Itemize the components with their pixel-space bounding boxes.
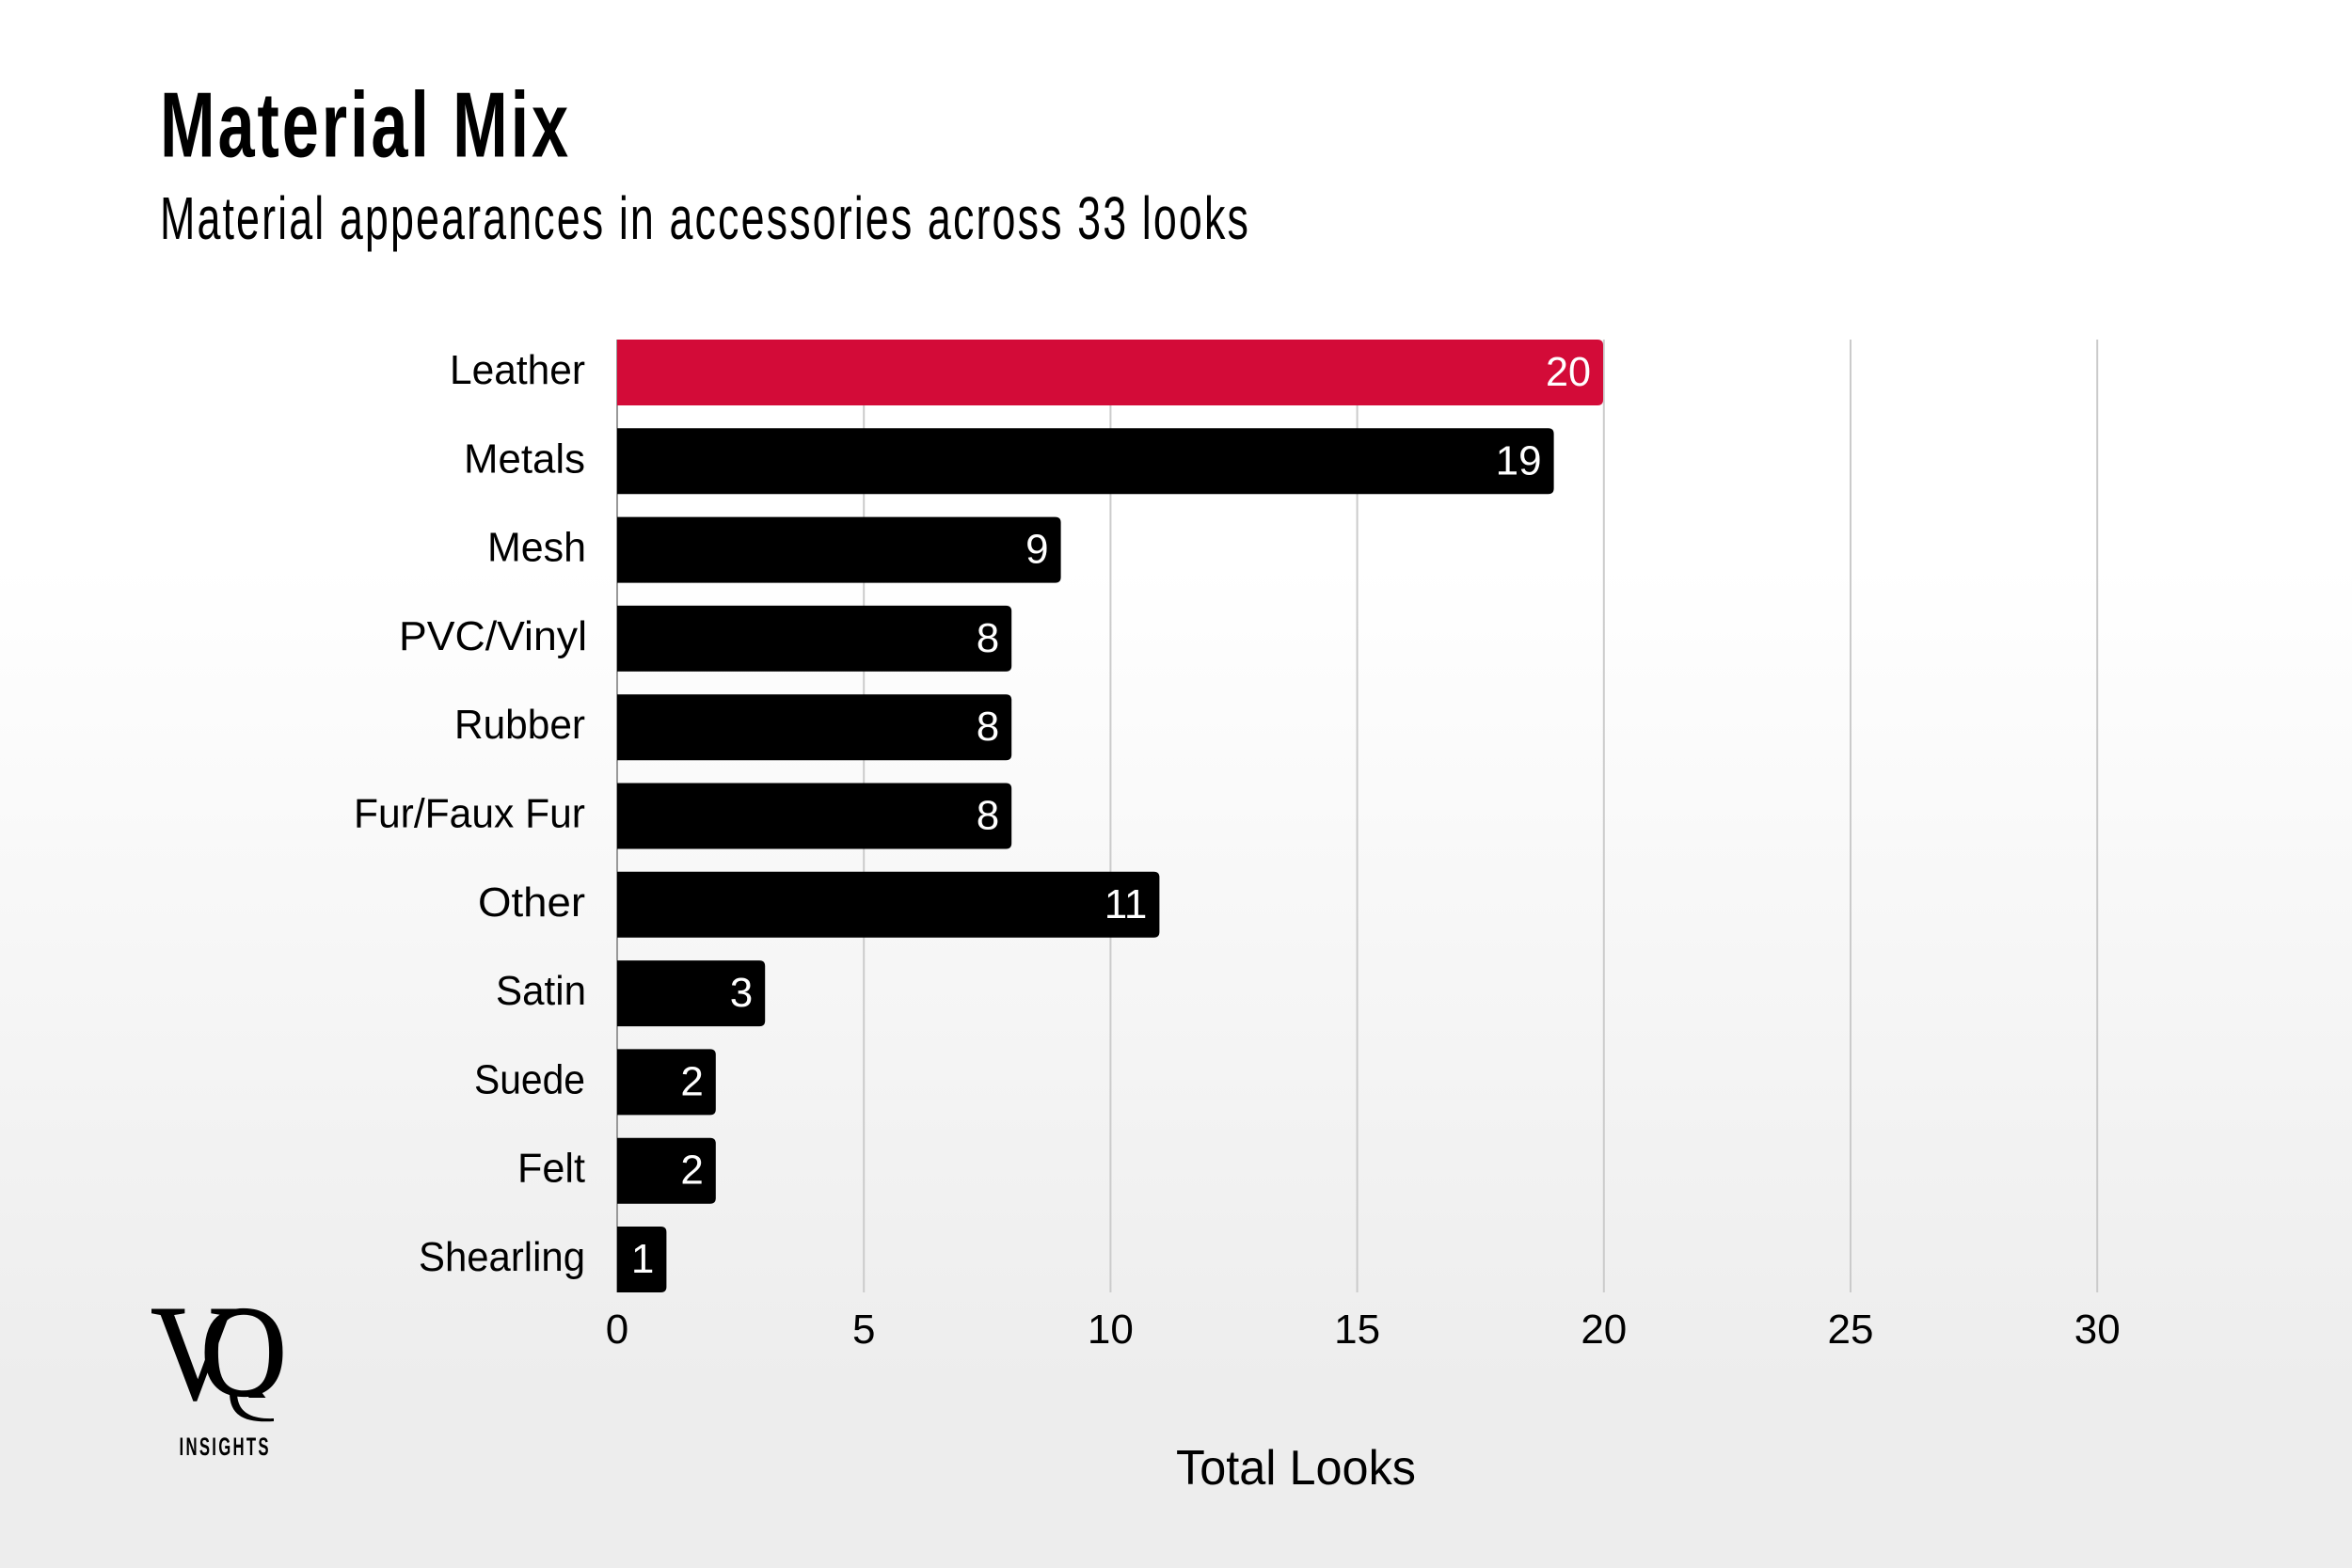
category labels: Satin [496,968,586,1014]
bar: Leather [617,340,1603,405]
bar: Satin [617,960,765,1026]
x axis tick labels [606,1307,2121,1353]
category labels: Other [478,879,585,926]
bar: Metals [617,428,1554,494]
logo: VQ Insights: Q [200,1279,287,1423]
bar: Mesh [617,517,1061,583]
category labels: Mesh [487,525,586,571]
x axis tick labels: 25 [1828,1307,1873,1353]
subtitle: Material appearances in accessories across 33 looks [160,184,1250,252]
category labels: Metals [464,436,585,482]
bar: Other: 11 [1104,881,1147,927]
logo: VQ Insights [151,1307,282,1456]
logo: VQ Insights: V [151,1278,239,1429]
x axis tick labels: 15 [1334,1307,1380,1353]
category labels [354,347,587,1280]
category labels: Suede [474,1056,585,1102]
x axis tick labels: 10 [1088,1307,1134,1353]
bar: Suede: 2 [680,1058,704,1104]
category axis line [616,340,618,1292]
x axis tick labels: 5 [852,1307,875,1353]
bar: Shearling: 1 [631,1236,654,1282]
bar: Rubber: 8 [977,704,999,750]
x axis title: Total Looks [1176,1441,1416,1496]
bar: PVC/Vinyl [617,606,1011,672]
category labels: Shearling [419,1234,585,1280]
gridlines [864,340,2097,1292]
category labels: Rubber [454,702,585,748]
bar: Fur/Faux Fur [617,783,1011,848]
category labels: Fur/Faux Fur [354,790,585,837]
category labels: PVC/Vinyl [399,613,587,659]
logo: VQ Insights: INSIGHTS [179,1433,271,1461]
bar: Other [617,872,1159,938]
bar: Shearling [617,1227,666,1292]
bar: Satin: 3 [730,970,753,1016]
bar chart [617,340,1603,1292]
category labels: Felt [517,1146,585,1192]
bar: Suede [617,1049,716,1115]
x axis tick labels: 0 [606,1307,628,1353]
bar: Metals: 19 [1496,437,1542,483]
bar: Felt: 2 [680,1148,704,1194]
bar: Rubber [617,694,1011,760]
x axis tick labels: 20 [1581,1307,1627,1353]
category labels: Leather [450,347,585,393]
bar: PVC/Vinyl: 8 [977,615,999,661]
bar: Fur/Faux Fur: 8 [977,792,999,839]
title: Material Mix [160,73,571,177]
bar: Felt [617,1138,716,1204]
bar: Leather: 20 [1546,349,1591,395]
x axis tick labels: 30 [2074,1307,2121,1353]
bar: Mesh: 9 [1025,527,1049,573]
